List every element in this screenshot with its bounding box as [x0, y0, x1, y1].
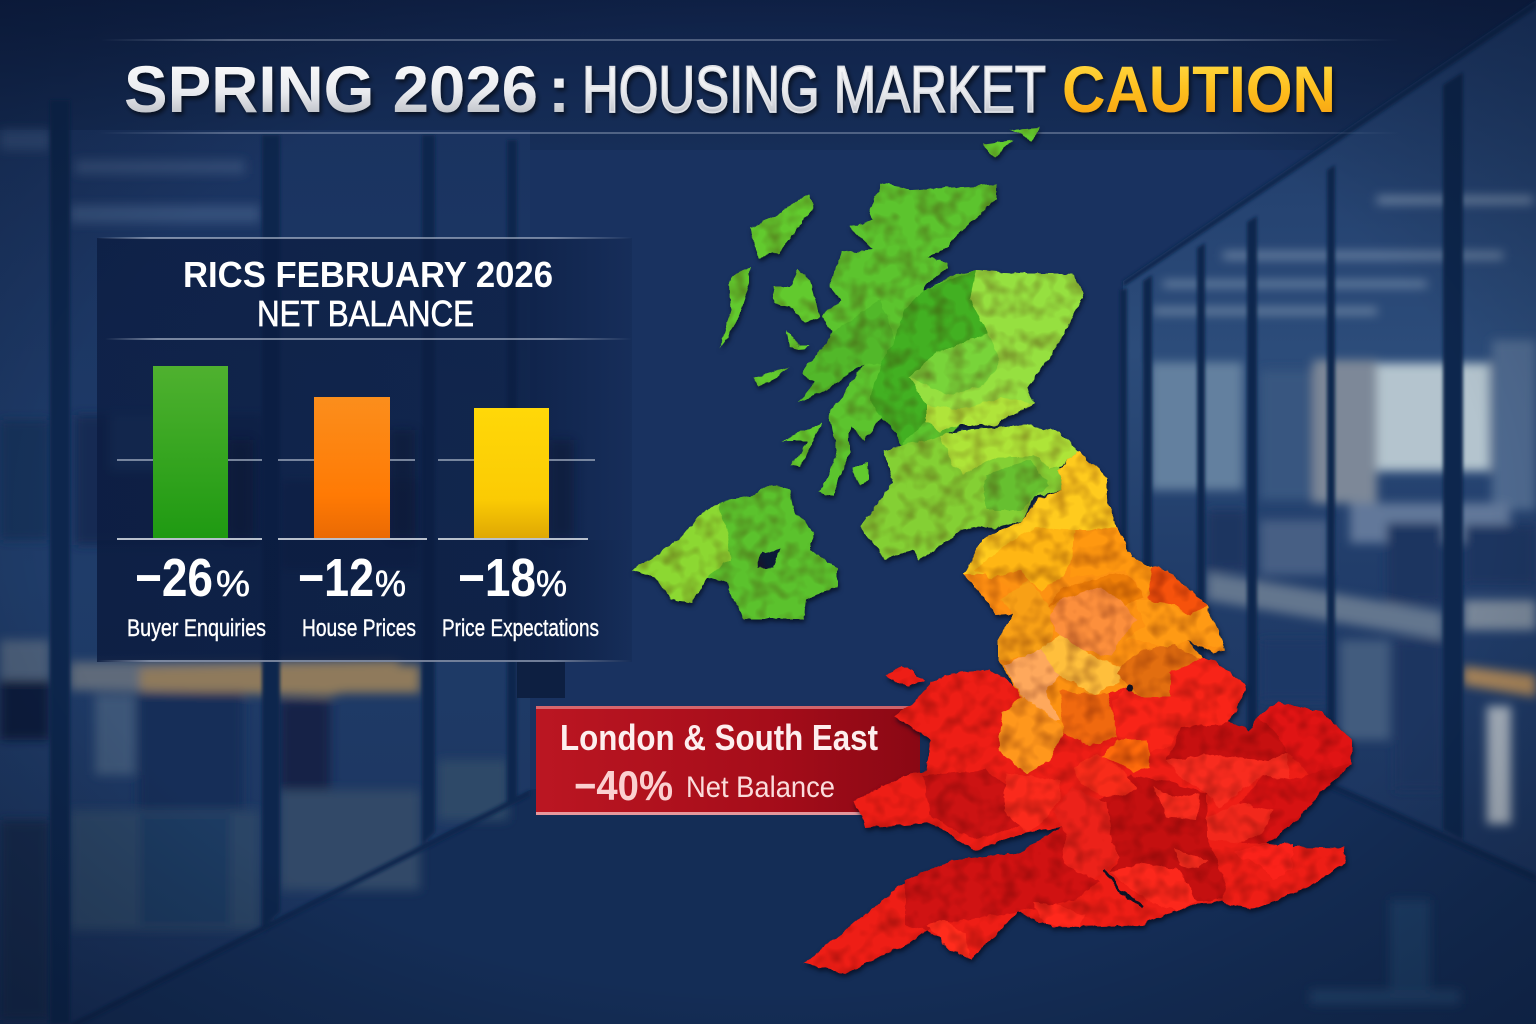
stat: price expectations: −18: [458, 548, 536, 608]
title: CAUTION: [1062, 52, 1336, 126]
stat: house prices: House Prices: [302, 615, 416, 642]
stat: buyer enquiries: %: [216, 563, 250, 604]
stat: buyer enquiries: −26: [135, 548, 213, 608]
panel: RICS net balance: [97, 237, 632, 698]
panel heading: RICS FEBRUARY 2026: [183, 254, 553, 295]
stat: price expectations: Price Expectations: [442, 615, 599, 642]
right office interior: [1150, 196, 1536, 1004]
Scotland: [798, 183, 1084, 497]
stat: price expectations: [442, 548, 599, 642]
Northern Ireland: [632, 485, 837, 618]
Scottish islands: [719, 128, 1040, 487]
left office interior: [0, 130, 508, 1020]
stat: buyer enquiries: [127, 548, 266, 642]
stat: house prices: [298, 548, 416, 642]
title: [100, 39, 1400, 134]
callout: London and South East: London & South East: [560, 717, 878, 758]
stat: price expectations: %: [536, 563, 567, 604]
stat: house prices: %: [375, 563, 406, 604]
stat: house prices: −12: [298, 548, 374, 608]
title: SPRING 2026: [124, 52, 538, 126]
Northern England and Midlands: [963, 450, 1225, 773]
bar chart: [117, 366, 595, 540]
Wales and southern England: [804, 657, 1352, 973]
panel heading: NET BALANCE: [257, 293, 474, 334]
Southern Scotland: [861, 425, 1078, 560]
UK regional net balance map: [632, 128, 1352, 973]
callout: London and South East: −40%: [574, 762, 673, 809]
callout: London and South East: [536, 706, 920, 815]
stat: buyer enquiries: Buyer Enquiries: [127, 615, 266, 642]
title: :: [548, 52, 570, 126]
callout: London and South East: Net Balance: [686, 771, 835, 804]
panel heading: [183, 254, 553, 334]
title: HOUSING MARKET: [582, 52, 1046, 126]
